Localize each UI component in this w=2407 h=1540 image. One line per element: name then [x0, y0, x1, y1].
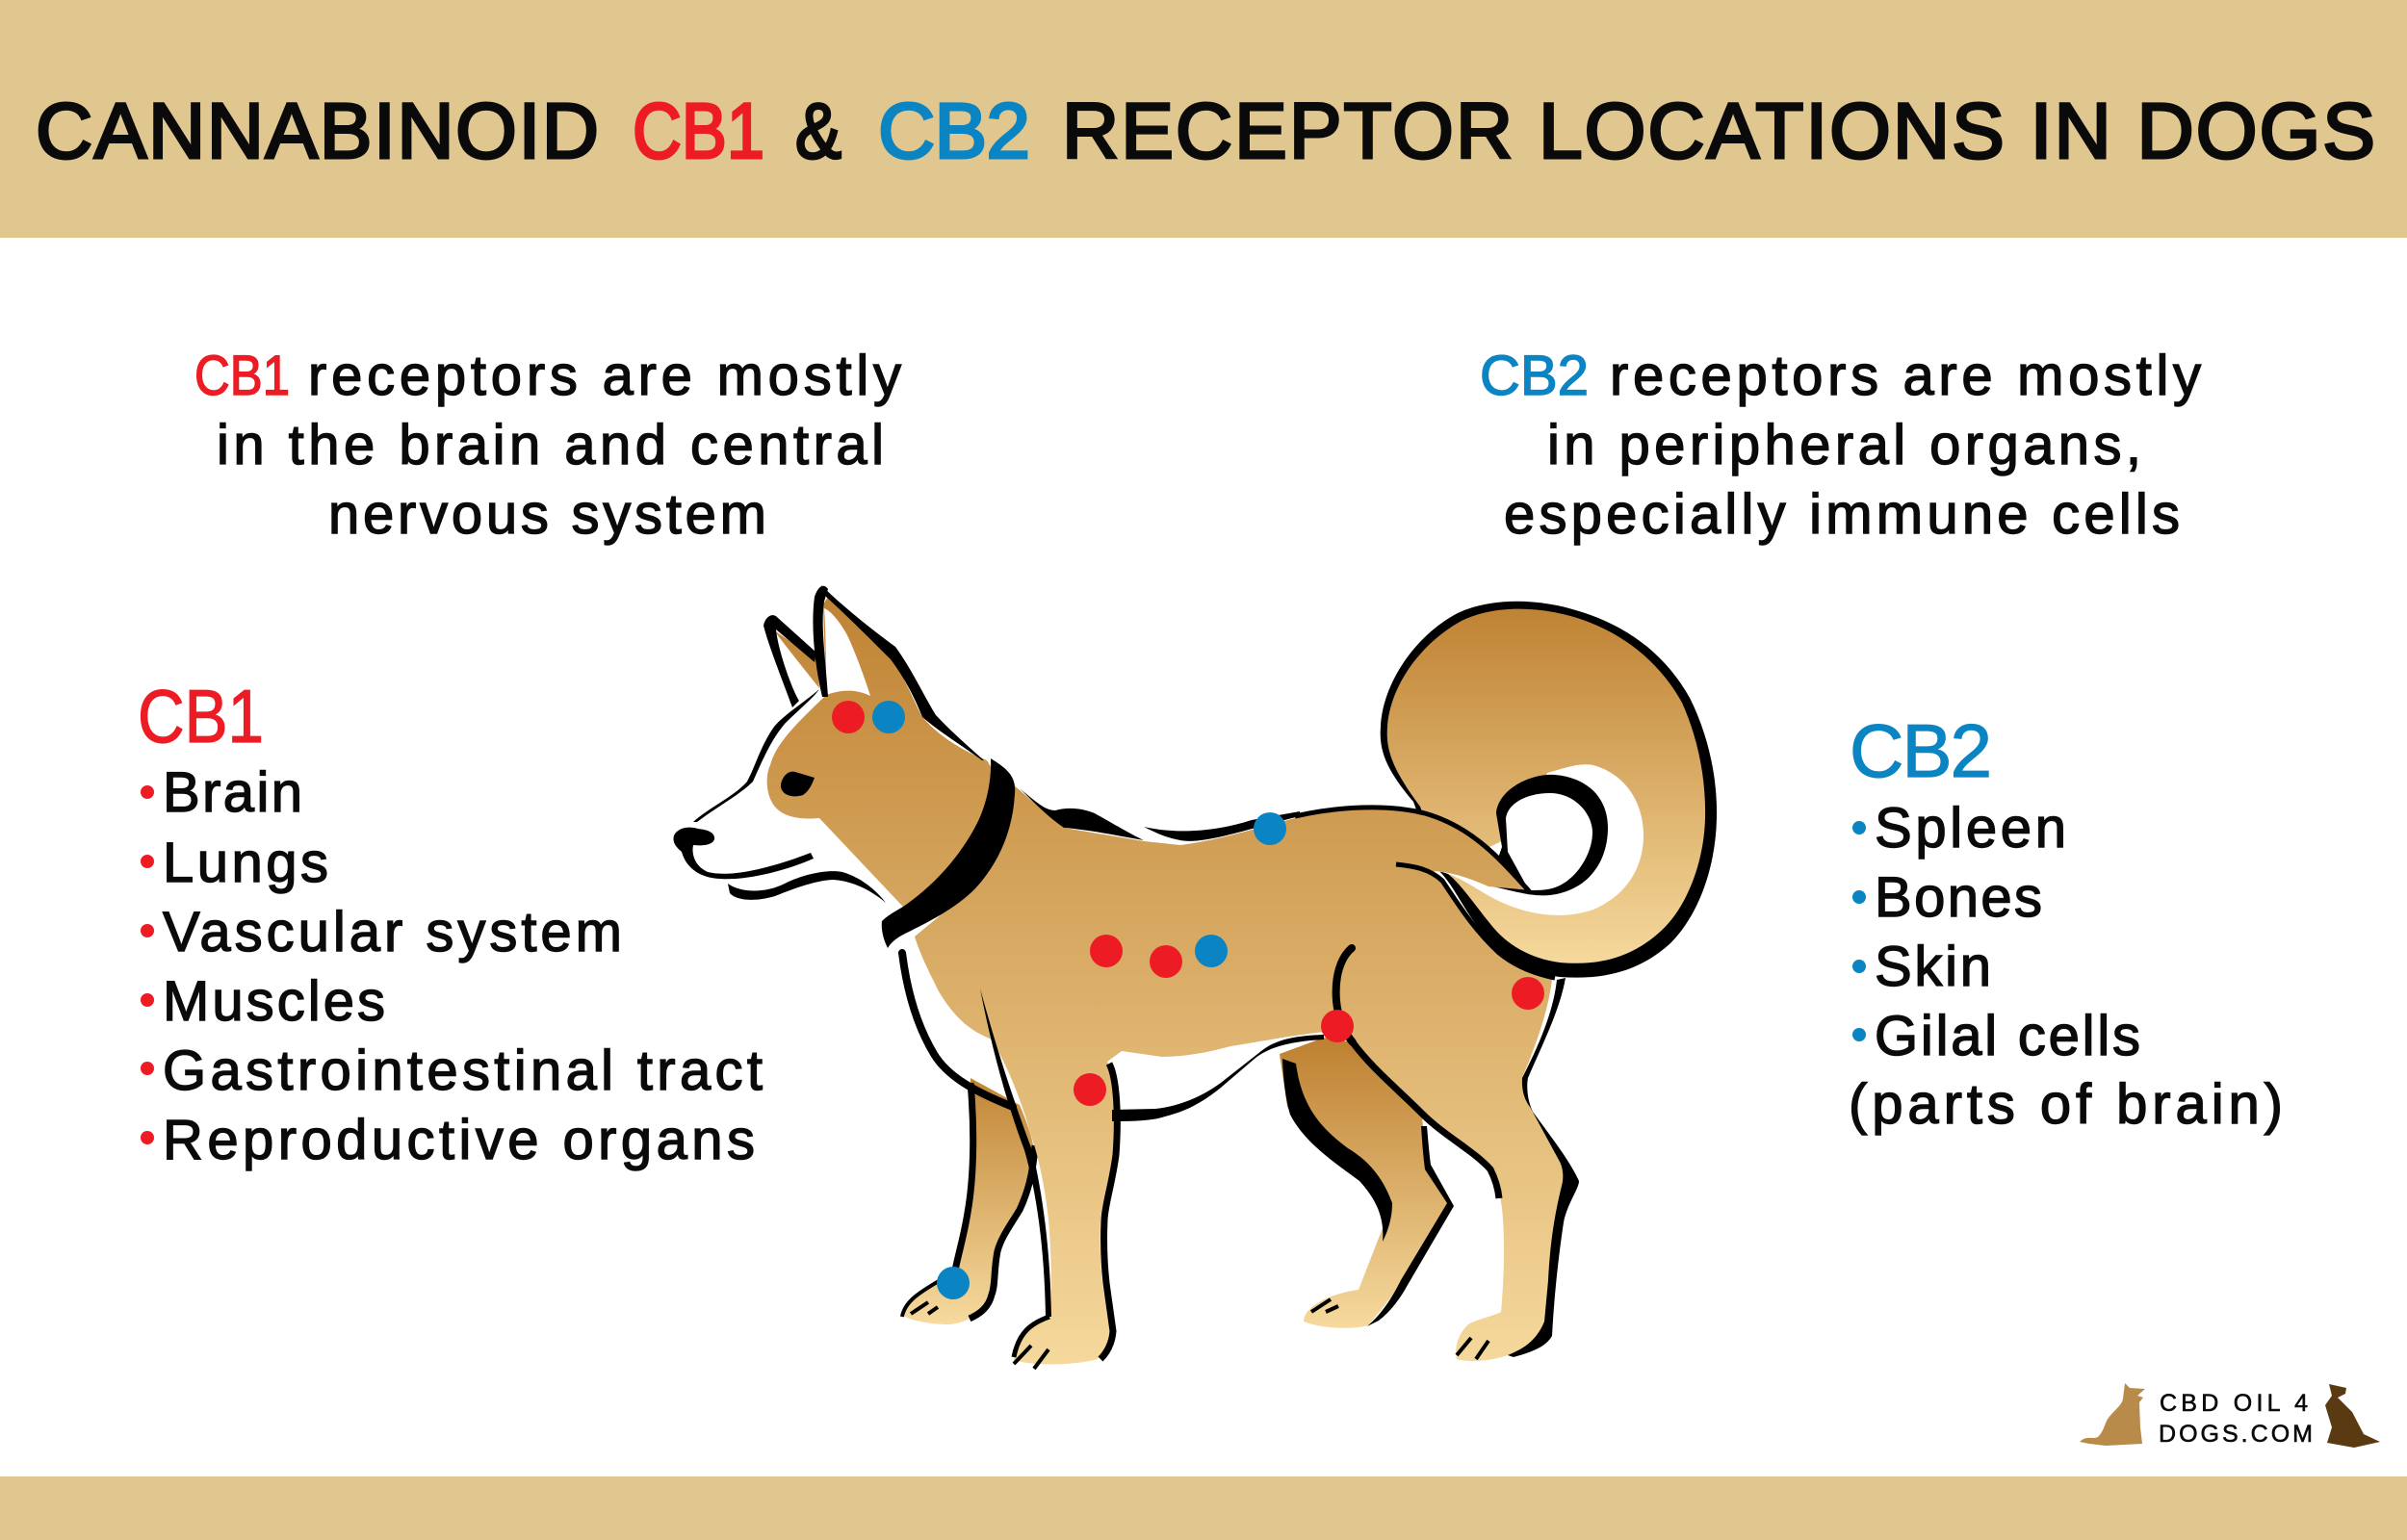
body fill — [915, 784, 1563, 1364]
footer band — [0, 1476, 2407, 1540]
far hind leg — [1280, 1038, 1454, 1328]
eye — [781, 772, 815, 796]
back outline — [1144, 808, 1531, 893]
text block: CB2 summary: receptors are mostly — [1610, 345, 2201, 407]
tail root underside — [1396, 864, 1555, 978]
CB1 heading: CB1 — [138, 674, 264, 758]
header band — [0, 0, 2407, 238]
head fill — [767, 597, 1011, 910]
CB2 heading: CB2 — [1850, 708, 1992, 793]
CB1 locations — [163, 761, 763, 1171]
text block: CB1 summary: receptors are mostly — [308, 345, 901, 407]
chest outline — [902, 953, 1013, 1107]
title: CANNABINOID — [36, 88, 599, 175]
back marking — [1021, 789, 1144, 840]
icon: tan dog silhouette — [2080, 1383, 2145, 1446]
CB2 locations — [1849, 797, 2283, 1136]
dog illustration — [673, 585, 1717, 1369]
panel: CB2 list — [1849, 708, 2283, 1136]
nose and mouth — [673, 828, 814, 879]
text block: CB2 summary: in peripheral organs, — [1547, 414, 2141, 476]
panel: CB1 list — [138, 674, 763, 1171]
CB2 locations: Gilal cells — [1875, 1005, 2140, 1067]
text block: CB2 summary: CB2 — [1480, 345, 1589, 407]
logo text — [2159, 1390, 2313, 1448]
text block: CB2 summary — [1480, 345, 2201, 546]
near hind leg outline — [1508, 978, 1579, 1357]
belly outline — [1112, 1035, 1324, 1121]
near ear outline — [813, 585, 984, 760]
CB1 locations: Lungs — [163, 832, 328, 894]
far front leg — [902, 1078, 1035, 1324]
front leg separator — [980, 988, 1051, 1317]
haunch line — [1336, 948, 1353, 1042]
tail — [1381, 602, 1717, 978]
ear inner white — [824, 608, 870, 696]
CB1 locations: Gastrointestinal tract — [163, 1040, 763, 1102]
CB2 locations: Skin — [1875, 936, 1991, 998]
head outline — [693, 689, 819, 822]
text block: CB1 summary: nervous system — [328, 483, 766, 546]
title: CB2 — [878, 88, 1030, 175]
logo text: CBD OIL 4 — [2160, 1390, 2308, 1417]
CB1 locations: Reproductive organs — [163, 1109, 755, 1171]
CB1 locations: Brain — [163, 761, 302, 824]
hind leg inner line — [1353, 1042, 1499, 1198]
CB2 locations: Spleen — [1875, 797, 2066, 860]
near front leg outline — [1100, 1064, 1117, 1359]
text block: CB1 summary — [194, 345, 901, 546]
CB2 locations: Bones — [1875, 866, 2042, 929]
CB1 bullets — [141, 785, 154, 1144]
logo — [2080, 1383, 2380, 1448]
CB2 bullets — [1852, 821, 1866, 1041]
text block: CB1 summary: CB1 — [194, 345, 290, 407]
lower jaw — [728, 871, 886, 903]
title: & — [795, 88, 841, 175]
text block: CB1 summary: in the brain and central — [217, 414, 884, 476]
receptor markers — [832, 701, 1544, 1299]
title — [36, 88, 2375, 175]
CB1 locations: Muscles — [163, 970, 385, 1033]
paws and toes — [1014, 1317, 1488, 1369]
icon: dark dog silhouette — [2325, 1384, 2380, 1448]
CB1 locations: Vascular system — [163, 901, 622, 963]
logo text: DOGS.COM — [2159, 1421, 2313, 1448]
collar — [882, 758, 1015, 948]
far ear — [764, 615, 819, 707]
title: CB1 — [633, 88, 764, 175]
title: RECEPTOR LOCATIONS IN DOGS — [1062, 88, 2375, 175]
CB2 locations: (parts of brain) — [1849, 1073, 2283, 1136]
text block: CB2 summary: especially immune cells — [1504, 483, 2180, 546]
